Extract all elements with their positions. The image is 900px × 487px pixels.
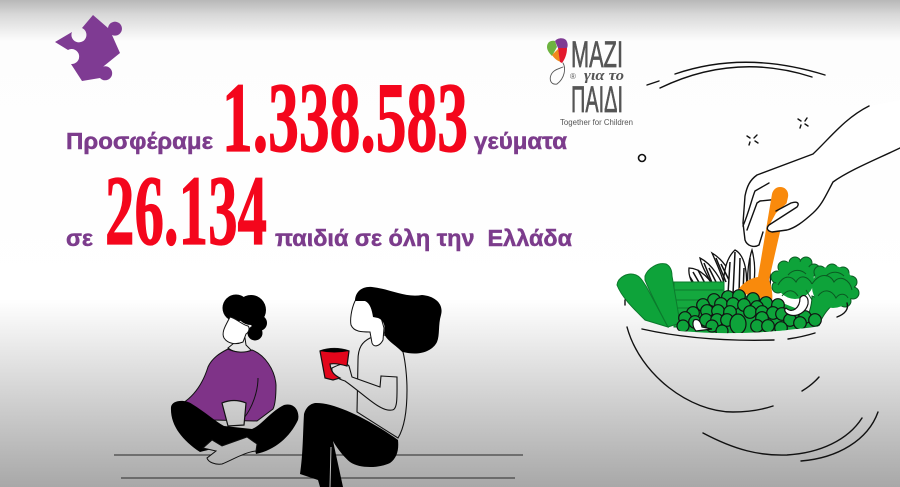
bowl outline <box>625 300 878 461</box>
face <box>223 317 249 344</box>
hair <box>222 294 267 340</box>
hair <box>355 287 442 354</box>
person: woman with long hair holding red cup <box>300 287 442 487</box>
crossed feet <box>203 437 257 464</box>
headline line 1 <box>66 62 567 173</box>
leaf stripes <box>690 252 750 294</box>
icon: purple puzzle piece <box>55 15 122 81</box>
green vegetable sticks <box>617 264 724 327</box>
legs <box>300 403 398 487</box>
arm <box>332 364 397 410</box>
hand outline behind spoon <box>743 100 900 246</box>
cashews <box>693 296 808 331</box>
striped leaves <box>689 250 770 296</box>
logo: Mazi gia to Paidi: ΜΑΖΙ <box>571 34 623 75</box>
neck <box>228 338 252 353</box>
decorative arcs and sparkles above bowl <box>638 62 825 162</box>
headline line 2: παιδιά σε όλη την Ελλάδα <box>275 225 572 251</box>
red cup <box>320 348 349 380</box>
logo: Mazi gia to Paidi: για το <box>584 68 624 84</box>
person: seated child in purple sweater <box>171 294 298 464</box>
logo: Mazi gia to Paidi: ® <box>570 72 576 81</box>
logo: Mazi gia to Paidi <box>547 34 633 127</box>
bench lines <box>114 455 523 478</box>
broccoli <box>771 257 859 328</box>
cup <box>222 400 246 426</box>
peas <box>677 290 821 337</box>
torso <box>357 335 407 438</box>
headline line 2 <box>66 155 572 266</box>
logo: Mazi gia to Paidi: Together for Children <box>560 118 633 127</box>
salad bowl illustration <box>617 187 878 461</box>
headline line 2: σε <box>66 225 93 251</box>
face <box>351 298 384 346</box>
headline line 1: Προσφέραμε <box>66 128 213 154</box>
headline line 1: 1.338.583 <box>222 62 468 173</box>
headline line 1: γεύματα <box>474 128 567 154</box>
spoon <box>737 187 788 301</box>
hand thumb over spoon <box>767 148 900 232</box>
legs <box>171 401 298 454</box>
headline line 2: 26.134 <box>105 155 267 266</box>
sweater <box>183 349 276 421</box>
icon: puzzle heart balloon <box>547 38 568 84</box>
logo: Mazi gia to Paidi: ΠΑΙΔΙ <box>571 79 623 120</box>
